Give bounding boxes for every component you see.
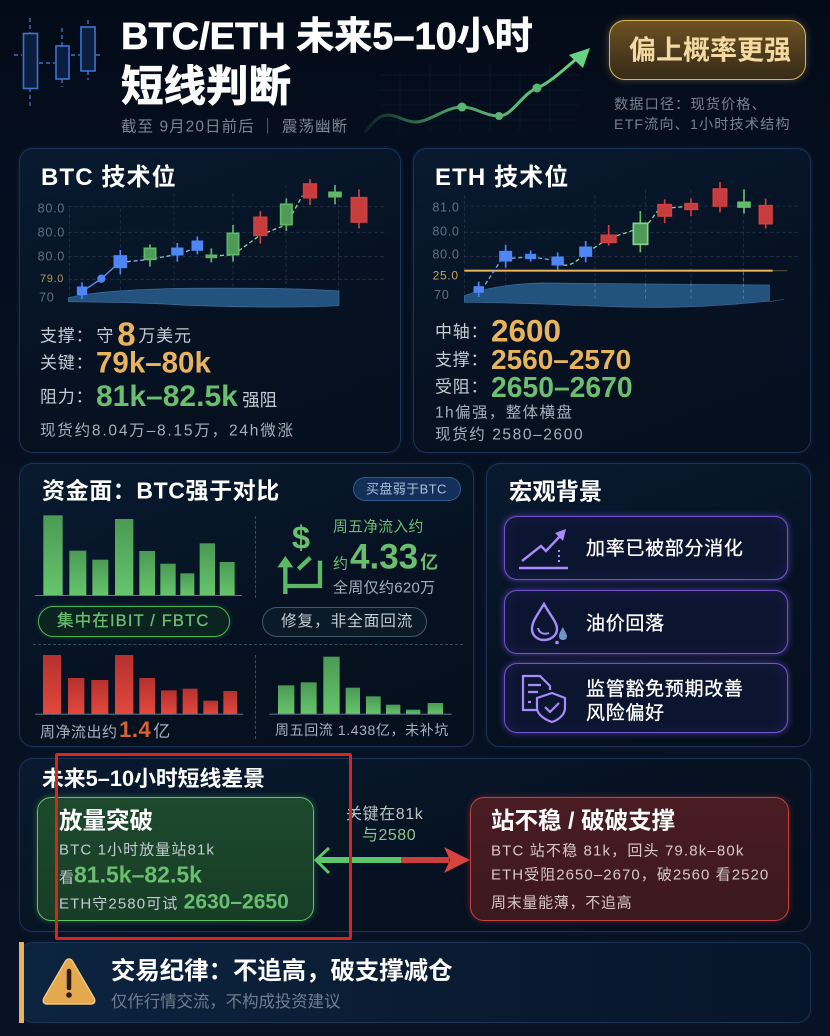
title: BTC/ETH 未来5–10小时: [121, 16, 533, 58]
pill: buying weaker than BTC: 买盘弱于BTC: [366, 482, 447, 496]
header icon: candlesticks: [14, 18, 100, 106]
panel: trading discipline: [19, 942, 811, 1023]
candlestick chart: ETH: 70: [434, 288, 449, 302]
rebound caption: 周五回流 1.438亿，未补坑: [275, 722, 449, 738]
candlestick chart: BTC: 70: [39, 291, 54, 305]
outflow caption: 周净流出约 1.4亿: [40, 717, 171, 742]
subtitle: 截至 9月20日前后 ｜ 震荡幽断: [121, 118, 348, 135]
friday inflow label: 周五净流入约: [333, 520, 424, 536]
resistance value: 2650–2670: [491, 371, 633, 403]
friday inflow value: 约4.33亿: [333, 538, 438, 576]
data scope note: [614, 96, 791, 133]
card: breakout: [37, 797, 314, 921]
arrow: two-way: [314, 847, 470, 874]
data scope note: ETF流向、1小时技术结构: [614, 117, 791, 133]
pivot value: 2600: [491, 312, 561, 348]
icon: warning: [42, 958, 96, 1005]
heading: scenarios: 未来5–10小时短线差景: [42, 766, 265, 791]
heading: funds: 资金面：BTC强于对比: [42, 478, 280, 504]
candlestick chart: BTC: 80.0: [38, 225, 65, 239]
icon: dollar inflow: $: [292, 519, 310, 556]
pill: IBIT / FBTC: 集中在IBIT / FBTC: [57, 612, 209, 630]
resistance row: 阻力：: [40, 388, 93, 406]
data scope note: 数据口径：现货价格、: [614, 97, 767, 113]
divider: [255, 516, 256, 598]
panel: macro background: [486, 463, 811, 747]
key text 2: 与2580: [362, 827, 416, 844]
line 2: ETH受阻2650–2670，破2560 看2520: [491, 866, 769, 884]
card: oil: [504, 590, 788, 654]
candlestick chart: BTC: [38, 179, 387, 308]
pill: IBIT / FBTC: [38, 606, 230, 637]
label: 监管豁免预期改善: [586, 679, 744, 700]
heading: macro: 宏观背景: [509, 478, 602, 504]
candlestick chart: ETH: 80.0: [432, 247, 460, 261]
panel: ETH technical levels: [413, 148, 811, 453]
trend note: 1h偏强，整体横盘: [435, 404, 573, 421]
key range: 79k–80k: [96, 346, 211, 379]
icon: document shield: [522, 674, 566, 724]
divider: [255, 655, 256, 739]
annotation: red highlight box: [55, 753, 352, 940]
pill: repair: 修复，非全面回流: [281, 613, 413, 630]
spot note: 现货约8.04万–8.15万，24h微涨: [40, 422, 295, 439]
divider: [33, 644, 463, 645]
card: failure: [470, 797, 789, 921]
candlestick chart: BTC: 80.0: [38, 249, 65, 263]
candlestick chart: ETH: 80.0: [432, 225, 460, 239]
icon: oil drop: [530, 602, 567, 644]
heading: BTC: BTC 技术位: [41, 164, 177, 191]
line 3: 周末量能薄，不追高: [491, 894, 632, 912]
panel: scenarios: [19, 758, 811, 932]
line 1: BTC 站不稳 81k，回头 79.8k–80k: [491, 842, 745, 860]
support value: 2560–2570: [491, 344, 631, 375]
card: regulation: [504, 663, 788, 733]
support row: 支撑：守8万美元: [40, 316, 192, 352]
accent bar: [19, 942, 24, 1023]
icon: rising chart: [519, 529, 568, 570]
pill: buying weaker than BTC: [353, 477, 461, 501]
candlestick chart: ETH: 81.0: [432, 201, 460, 215]
support row: 支撑：: [435, 350, 488, 370]
pivot row: 中轴：: [435, 322, 488, 342]
label: 风险偏好: [586, 702, 665, 724]
card: rate hikes: [504, 516, 788, 580]
disclaimer: 仅作行情交流，不构成投资建议: [111, 993, 340, 1011]
discipline headline: 交易纪律：不追高，破支撑减仓: [111, 958, 452, 985]
title line 2: 短线判断: [121, 64, 291, 111]
candlestick chart: ETH: 25.0: [433, 269, 459, 283]
card title: 放量突破: [59, 807, 153, 833]
candlestick chart: BTC: 80.0: [38, 201, 65, 215]
key row: 关键：: [40, 354, 93, 372]
line 3: ETH守2580可试 2630–2650: [59, 890, 289, 914]
line 1: BTC 1小时放量站81k: [59, 842, 215, 858]
label: 加率已被部分消化: [586, 538, 744, 560]
resistance range: 81k–82.5k 强阻: [96, 380, 277, 413]
bar chart: Friday rebound: [269, 656, 452, 715]
card title: 站不稳 / 破破支撑: [491, 807, 675, 833]
badge: bias: [609, 20, 806, 80]
candlestick chart: ETH: [432, 182, 798, 308]
panel: BTC technical levels: [19, 148, 401, 453]
candlestick chart: BTC: 79.0: [40, 273, 64, 285]
heading: ETH: ETH 技术位: [435, 164, 569, 191]
pill: repair: [262, 607, 427, 637]
icon: dollar inflow: [277, 519, 322, 594]
resistance row: 受阻：: [435, 378, 488, 396]
bar chart: BTC inflows: [35, 515, 242, 596]
badge: bias: 偏上概率更强: [629, 36, 791, 66]
bar chart: ETH outflows: [35, 655, 244, 715]
key text: 关键在81k: [346, 806, 423, 823]
panel: fund flows: [19, 463, 474, 747]
label: 油价回落: [586, 614, 665, 634]
spot note: 现货约 2580–2600: [435, 426, 584, 443]
line 2: 看81.5k–82.5k: [59, 862, 202, 888]
label: [586, 678, 744, 724]
rising trend arrow: [364, 48, 590, 133]
weekly note: 全周仅约620万: [333, 580, 435, 596]
